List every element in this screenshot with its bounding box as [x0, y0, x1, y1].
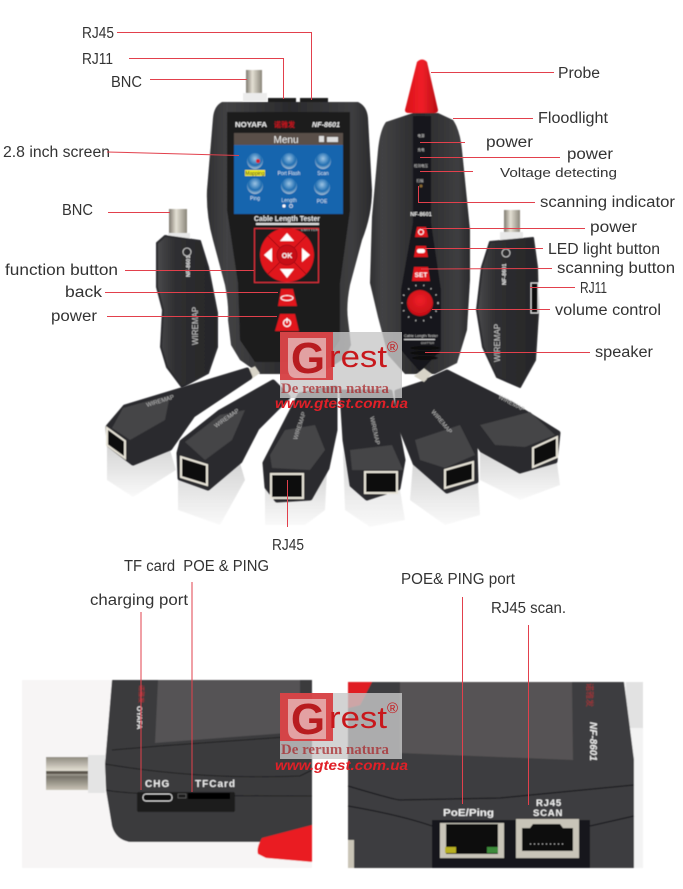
device front edge: [348, 785, 634, 826]
top RJ ports: [268, 98, 328, 103]
speaker label: speaker: [595, 344, 653, 361]
PoE Ping text: PoE/Ping: [443, 807, 494, 819]
RJ45 scan port: [516, 819, 579, 858]
logo row: [235, 120, 340, 129]
callout labels: bottom photos: [90, 558, 566, 805]
adapter reflections: [107, 447, 560, 527]
watermark top: rest: [329, 339, 387, 374]
left BNC wiremap remote: NF-8601: [186, 256, 192, 277]
right bottom photo: [348, 682, 643, 868]
watermark bottom: [275, 693, 408, 773]
colour screen: Port Flash: [278, 171, 301, 177]
RJ45 SCAN text: SCAN: [533, 808, 563, 819]
front panel: [227, 112, 350, 362]
charging port label: charging port: [90, 592, 189, 609]
port recess: [432, 820, 590, 868]
remote 5: [397, 382, 476, 491]
logo on side: OYAFA: [135, 706, 142, 729]
TF card slot: [178, 793, 230, 799]
colour screen: Scan: [317, 171, 329, 177]
probe label: Probe: [558, 65, 600, 82]
colour screen: Ping: [250, 196, 260, 202]
bottom-left connector fragment: [348, 840, 354, 868]
back button: [278, 289, 297, 306]
SET button: SET: [415, 272, 427, 279]
remote 4: WIREMAP: [368, 416, 380, 445]
device top surface: [348, 682, 634, 868]
probe indicator labels: NF-8601: [410, 212, 432, 218]
cable length tester caption: [254, 214, 320, 232]
BNC collar in background: [626, 682, 643, 728]
logo row: NOYAFA: [235, 120, 268, 129]
colour screen: Mapping: [245, 171, 265, 177]
BNC remote label: [62, 202, 170, 219]
volume knob: [402, 285, 438, 321]
probe unit: [370, 60, 470, 374]
probe caption: [404, 334, 439, 345]
POE and PING port label: POE& PING port: [401, 571, 516, 588]
power indicator label: [420, 134, 533, 151]
watermark top: [275, 332, 408, 411]
RJ45 SCAN text: RJ45: [536, 798, 562, 809]
TFCard port text: TFCard: [195, 779, 236, 790]
callout labels: tester: [3, 25, 312, 325]
bezel edge: [105, 728, 312, 796]
cable length tester caption: EMITTER: [301, 227, 319, 232]
six wiremap remotes: [107, 366, 558, 500]
logo row: 诺雅发: [274, 120, 295, 129]
BNC top label: [111, 74, 247, 91]
photo background: [348, 682, 643, 868]
RJ45 top label: RJ45: [82, 25, 114, 42]
RJ45 scan label: RJ45 scan.: [491, 600, 566, 617]
probe body: [370, 113, 470, 374]
logo on side: 诺雅发: [137, 685, 145, 703]
side of device: [105, 680, 312, 842]
remote 6: [414, 368, 558, 471]
screen surface: [400, 682, 573, 760]
RJ11 top label: [82, 51, 284, 99]
PoE Ping port: [440, 823, 504, 858]
port panel: [137, 792, 235, 812]
watermark top: G: [291, 334, 325, 383]
power label: power: [51, 308, 97, 325]
speaker grille: [410, 346, 440, 360]
power indicator label: power: [486, 134, 533, 151]
scanning indicator label: scanning indicator: [540, 194, 675, 211]
LED light button: [414, 246, 428, 257]
BNC connector: [46, 755, 105, 793]
micro USB port: [143, 794, 172, 801]
voltage detecting label: Voltage detecting: [500, 165, 617, 180]
RJ11 label: [530, 280, 607, 297]
probe caption: EMITTER: [421, 341, 435, 345]
RJ11 top label: RJ11: [82, 51, 113, 68]
TF card POE and PING label: TF card POE & PING: [124, 558, 269, 575]
probe indicator labels: 电源: [418, 133, 425, 138]
red probe tip: [258, 825, 312, 862]
power button: [275, 314, 299, 331]
remote 5: WIREMAP: [429, 409, 452, 435]
watermark bottom: G: [291, 695, 325, 744]
RJ11 label: RJ11: [580, 280, 607, 297]
screen label: [3, 144, 239, 161]
photo background: [22, 680, 312, 868]
RJ45 SCAN text: [533, 798, 563, 819]
cable length tester caption: Cable Length Tester: [254, 214, 320, 223]
watermark bottom: www.gtest.com.ua: [275, 757, 408, 773]
probe indicator labels: [410, 133, 432, 218]
tester body: [207, 102, 372, 374]
back label: back: [65, 284, 102, 301]
left BNC wiremap remote: [157, 209, 217, 387]
probe indicator labels: 充电: [418, 147, 425, 152]
scanning indicator label: [418, 186, 675, 211]
remote 1: WIREMAP: [146, 395, 175, 409]
screen label: 2.8 inch screen: [3, 144, 110, 161]
right BNC wiremap remote: [477, 210, 538, 387]
remote 2: WIREMAP: [214, 408, 241, 430]
SET button: [412, 267, 430, 281]
left BNC wiremap remote: WIREMAP: [191, 307, 200, 345]
RJ45 adapter label: RJ45: [272, 537, 304, 554]
right BNC wiremap remote: NF-8601: [502, 264, 508, 285]
remote 6: WIREMAP: [497, 394, 525, 413]
watermark bottom: rest: [329, 700, 387, 735]
probe front panel: [401, 116, 441, 372]
probe indicator labels: 检测电压: [414, 163, 428, 168]
BNC connector on tester: [243, 70, 267, 101]
watermark top: www.gtest.com.ua: [275, 395, 408, 411]
second power label: power: [567, 146, 613, 163]
probe power button: [415, 227, 428, 237]
rotated red logo: 诺雅发: [585, 683, 595, 707]
volume control label: volume control: [555, 302, 661, 319]
watermark bottom: ®: [387, 700, 398, 717]
colour screen: [234, 133, 343, 214]
BNC remote label: BNC: [62, 202, 93, 219]
function button label: function button: [5, 262, 118, 279]
logo row: NF-8601: [312, 122, 340, 129]
remote 2: [179, 382, 288, 488]
RJ45 top label: [82, 25, 312, 100]
probe power button label: power: [590, 219, 637, 236]
watermark bottom: De rerum natura: [281, 742, 389, 758]
remote 4: [342, 392, 403, 498]
scanning button label: scanning button: [557, 260, 675, 277]
watermark top: De rerum natura: [281, 381, 389, 397]
screen surface: [155, 680, 300, 743]
remote 3: [265, 388, 335, 500]
left bottom photo: [22, 680, 312, 868]
probe caption: Cable Length Tester: [404, 334, 439, 338]
right BNC wiremap remote: WIREMAP: [493, 324, 502, 362]
remote 3: WIREMAP: [293, 411, 308, 441]
watermark top: ®: [387, 339, 398, 356]
red tip remnant: [348, 682, 372, 708]
RJ45 adapter label: [272, 480, 304, 554]
LED light button label: LED light button: [548, 241, 660, 258]
colour screen: Length: [281, 198, 297, 204]
CHG port text: CHG: [145, 779, 170, 790]
probe indicator labels: 扫描: [416, 178, 424, 183]
colour screen: POE: [317, 199, 328, 205]
floodlight label: Floodlight: [538, 110, 609, 127]
d-pad function buttons: OK: [282, 253, 292, 260]
remote 1: [107, 366, 260, 463]
red probe tip: [405, 60, 438, 113]
colour screen: Menu: [273, 135, 299, 146]
callout labels: probe: [272, 65, 675, 554]
BNC top label: BNC: [111, 74, 142, 91]
model name rotated: NF-8601: [587, 722, 598, 761]
logo on side: [135, 685, 145, 729]
main tester unit: [207, 70, 372, 374]
d-pad function buttons: [254, 228, 318, 282]
